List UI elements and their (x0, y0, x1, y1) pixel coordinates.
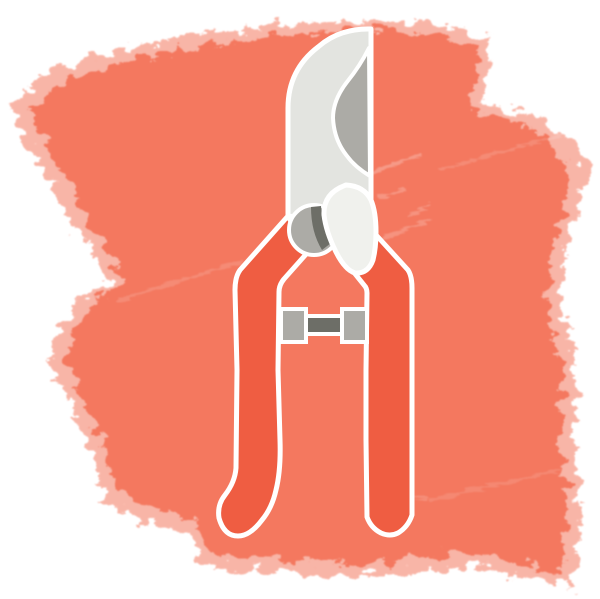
right handle (352, 236, 412, 535)
pivot bolt (289, 205, 339, 255)
upper blade (288, 29, 371, 222)
right spring block (342, 309, 367, 342)
texture streaks (120, 135, 560, 500)
spring connector (281, 309, 367, 342)
pivot cap (324, 185, 376, 273)
pivot dark band (311, 206, 331, 250)
left handle (219, 216, 308, 536)
left spring block (281, 309, 306, 342)
inner cutting blade (333, 48, 370, 176)
spring bar (304, 316, 344, 334)
